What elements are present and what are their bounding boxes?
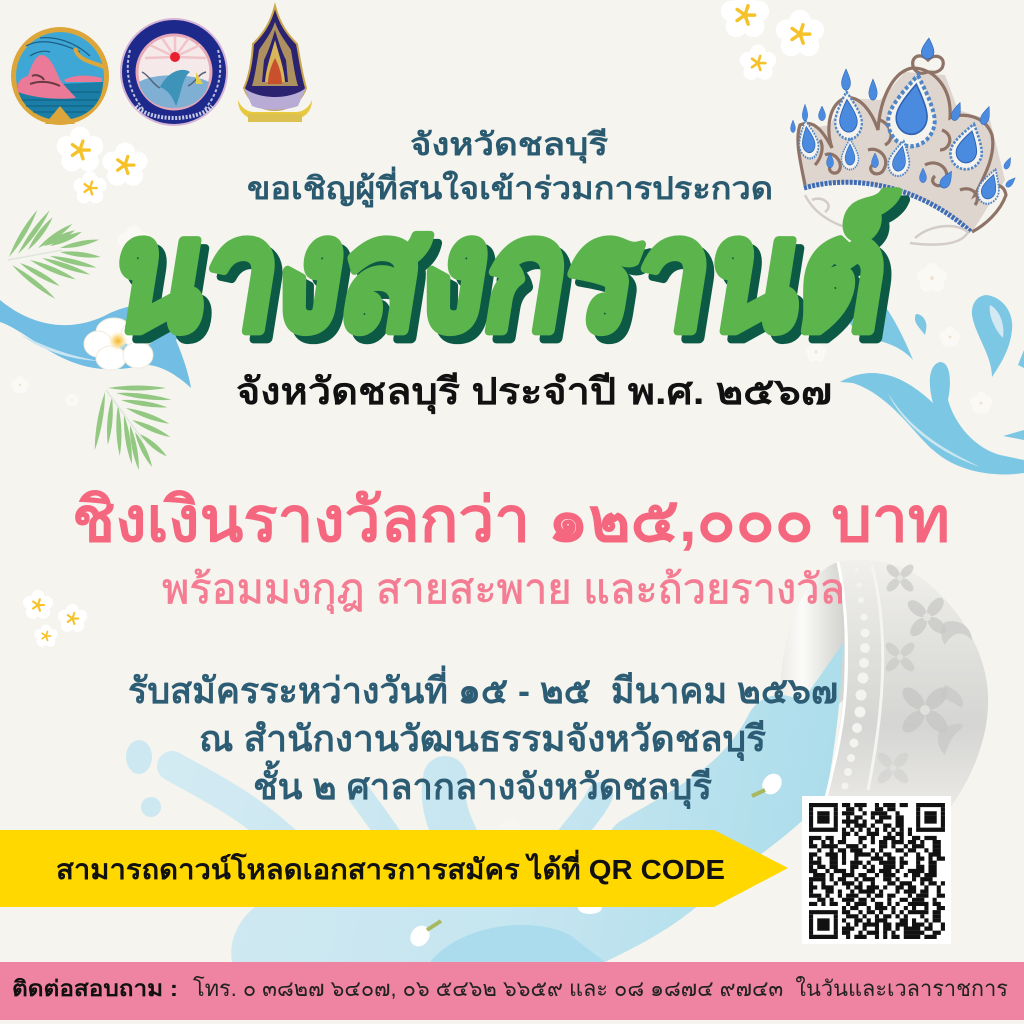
water splash bottom bbox=[126, 643, 843, 962]
contact bar bbox=[0, 962, 1024, 1020]
crown bbox=[791, 37, 1017, 245]
heading: invitation: ขอเชิญผู้ที่สนใจเข้าร่วมการประกวด bbox=[247, 166, 773, 208]
logo: Chonburi province seal bbox=[11, 27, 109, 125]
logo: Ministry of Culture emblem bbox=[238, 6, 312, 122]
application details: รับสมัครระหว่างวันที่ ๑๕ - ๒๕ มีนาคม ๒๕๖๗ bbox=[128, 665, 838, 711]
palm frond lower left bbox=[92, 386, 172, 471]
crown band bbox=[804, 182, 971, 232]
title: Nang Songkran: นางสงกรานต์ bbox=[111, 200, 907, 369]
water splash right bbox=[840, 295, 1024, 474]
crown gems bbox=[791, 37, 1017, 201]
bowl lip bbox=[826, 562, 847, 798]
flower cluster left bbox=[23, 590, 87, 647]
palm frond upper left bbox=[7, 209, 101, 301]
application details: ณ สำนักงานวัฒนธรรมจังหวัดชลบุรี bbox=[199, 718, 767, 762]
silver bowl bbox=[780, 553, 988, 815]
title: Nang Songkran: นางสงกรานต์ bbox=[103, 192, 900, 361]
water swoosh left bbox=[0, 300, 191, 388]
subtitle: province and year: จังหวัดชลบุรี ประจำปี พ.ศ. ๒๕๖๗ bbox=[236, 371, 832, 415]
prize headline: ชิงเงินรางวัลกว่า ๑๒๕,๐๐๐ บาท bbox=[72, 486, 950, 555]
flower cluster top right bbox=[721, 0, 824, 80]
flower cluster top left bbox=[57, 127, 147, 203]
logo: Provincial Administrative Organization seal bbox=[121, 19, 227, 125]
contact bar: โทร. ๐ ๓๘๒๗ ๖๔๐๗, ๐๖ ๕๔๖๒ ๖๖๕๙ และ ๐๘ ๑๘๗๔ ๙๗๔๓ ในวันและเวลาราชการ bbox=[193, 976, 1008, 1001]
crown gem frames bbox=[796, 72, 1005, 207]
yellow arrow banner bbox=[0, 830, 788, 907]
heading: invitation: จังหวัดชลบุรี bbox=[410, 127, 608, 164]
white plumeria flower bbox=[84, 318, 155, 370]
crown lower lace bbox=[805, 195, 968, 245]
contact bar: ติดต่อสอบถาม : bbox=[12, 976, 178, 1001]
crown scrollwork bbox=[798, 56, 1006, 232]
jasmine small bbox=[406, 770, 786, 950]
QR code bbox=[802, 796, 951, 944]
heading: invitation bbox=[247, 127, 773, 208]
crown body shade bbox=[797, 72, 1005, 232]
application details bbox=[128, 665, 838, 810]
yellow arrow banner: สามารถดาวน์โหลดเอกสารการสมัคร ได้ที่ QR CODE bbox=[56, 849, 725, 885]
prize detail: พร้อมมงกุฎ สายสะพาย และถ้วยรางวัล bbox=[162, 566, 845, 614]
faint background flowers bbox=[11, 226, 992, 414]
application details: ชั้น ๒ ศาลากลางจังหวัดชลบุรี bbox=[253, 760, 713, 810]
